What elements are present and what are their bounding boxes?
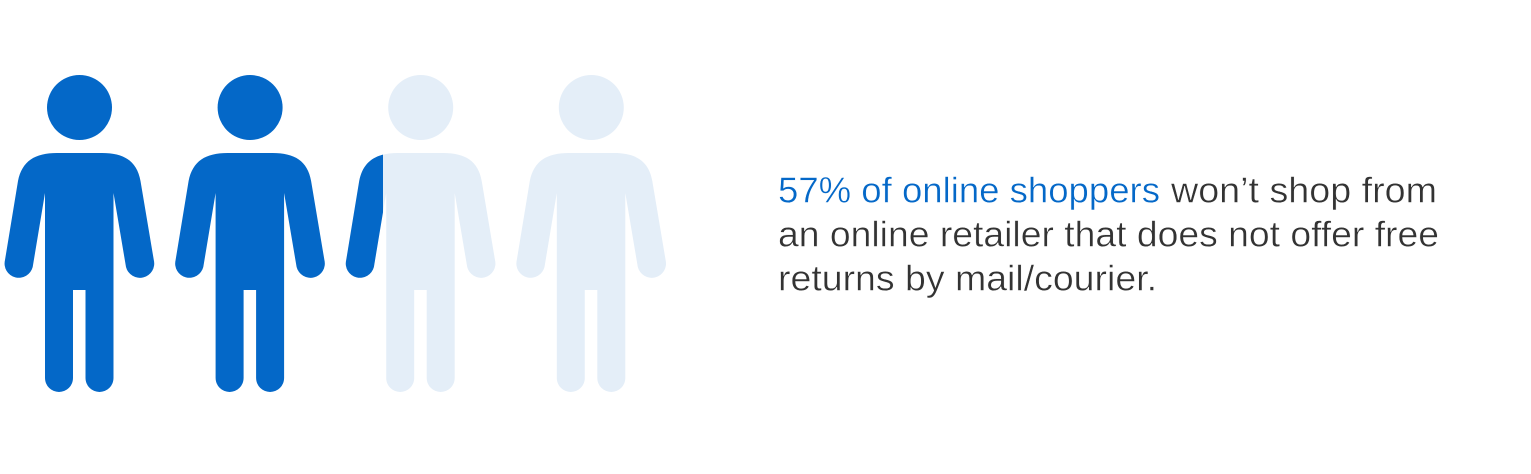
text block: statistic (778, 170, 1439, 298)
text block: statistic: won’t shop from (1170, 170, 1437, 210)
icon: person 4 empty (516, 75, 666, 392)
text block: statistic: returns by mail/courier. (778, 258, 1157, 298)
text block: statistic: an online retailer that does not offer free (778, 214, 1439, 254)
icon: person 1 filled (5, 75, 154, 392)
text block: statistic: 57% of online shoppers (778, 170, 1160, 210)
icon: person 2 filled (175, 75, 325, 392)
icon: person 3 partly filled (346, 75, 495, 392)
